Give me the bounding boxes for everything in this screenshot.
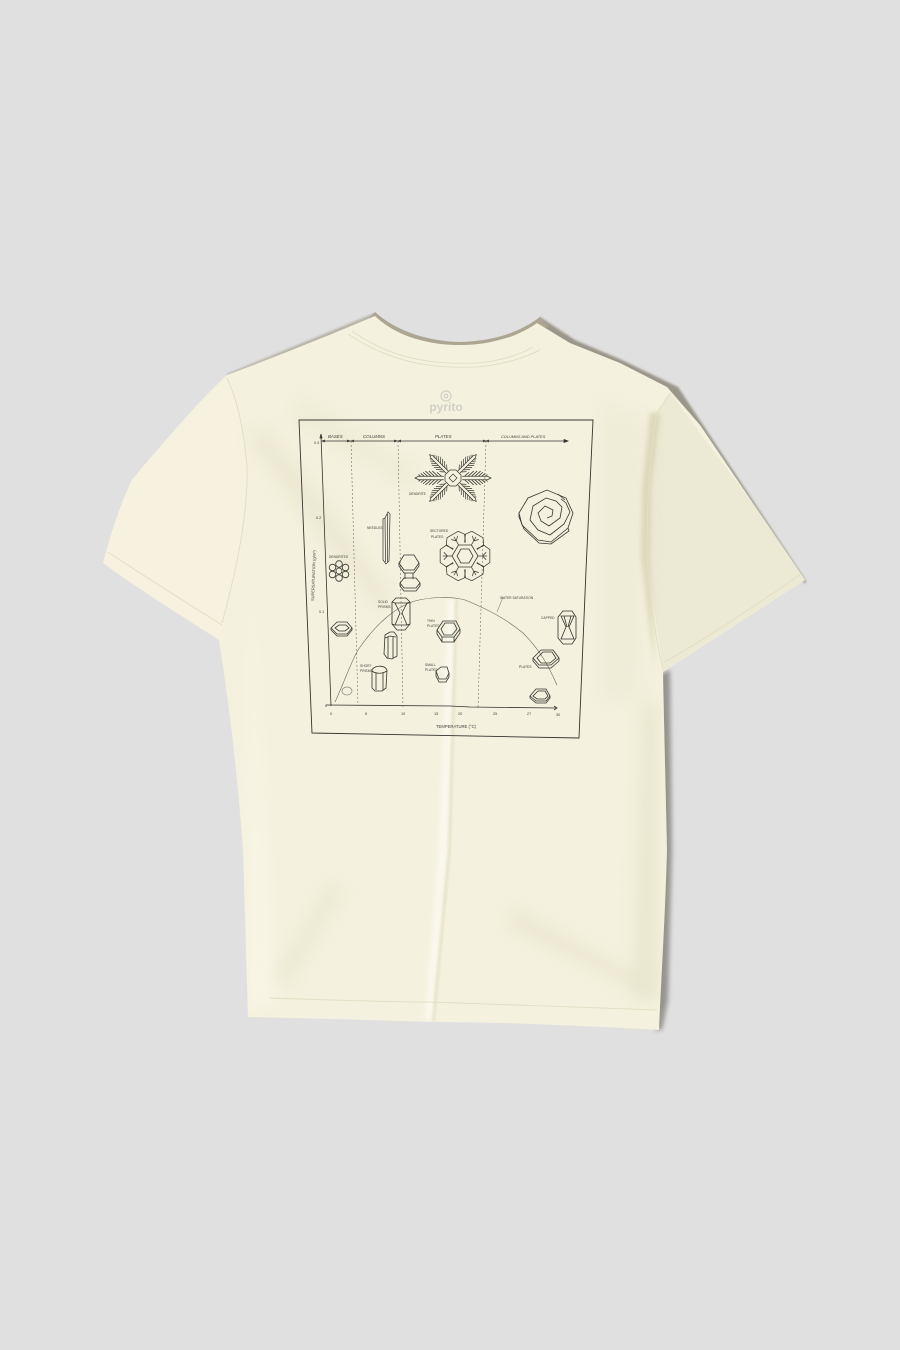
- left shoulder shadow: [227, 313, 375, 378]
- axis labels: 30: [556, 713, 560, 717]
- shirt body: [103, 316, 805, 1030]
- crystal labels: NEEDLES: [367, 526, 383, 530]
- shoulder shadow: [535, 317, 806, 584]
- crystal labels: SOLID: [378, 600, 389, 604]
- crystal: capped column: [399, 555, 420, 591]
- crystal: thin plate: [437, 621, 460, 642]
- seams: [108, 331, 800, 1010]
- axis labels: [310, 441, 560, 729]
- inner neck band: [367, 312, 549, 350]
- crystal: hexagonal plate left: [331, 622, 352, 636]
- axis labels: 27: [527, 712, 531, 716]
- chart print: [299, 420, 593, 738]
- axis labels: 0.2: [316, 516, 321, 520]
- crystal: needles: [383, 512, 390, 564]
- crystal: dendrite snowflake: [415, 450, 491, 506]
- temperature zone dashed lines: [351, 441, 486, 708]
- crystal labels: CAPPED: [541, 616, 555, 620]
- crystal: plate right upper: [533, 650, 559, 668]
- crystal labels: WATER SATURATION: [500, 596, 534, 600]
- crystal labels: DENDRITE: [409, 492, 427, 496]
- crystal labels: PLATES: [425, 668, 438, 672]
- crystal: short prism: [372, 666, 387, 691]
- axis labels: 5: [365, 712, 367, 716]
- crystal: small oval: [342, 687, 352, 695]
- axis labels: 0.3: [314, 441, 319, 445]
- crystal labels: PLATES: [427, 624, 440, 628]
- habit labels: PLATES: [435, 434, 452, 439]
- crystal: capped column right: [558, 611, 576, 644]
- crystal labels: DENDRITES: [329, 555, 349, 559]
- habit labels: COLUMNS: [363, 434, 385, 439]
- water saturation curve: [335, 597, 557, 702]
- axis labels: 15: [434, 712, 438, 716]
- axis labels: 25: [493, 712, 497, 716]
- crystal labels: SMALL: [425, 663, 436, 667]
- axis labels: 10: [401, 712, 405, 716]
- habit labels: [328, 434, 546, 439]
- axis labels: 0.1: [319, 610, 324, 614]
- crystal labels: SHORT: [360, 664, 371, 668]
- axis labels: 0: [325, 704, 327, 708]
- crystal: dendrite small: [329, 561, 349, 581]
- crystal labels: [329, 492, 555, 673]
- habit labels: COLUMNS AND PLATES: [501, 434, 546, 439]
- crystal labels: THIN: [427, 619, 435, 623]
- fabric shading: [258, 394, 805, 1022]
- growth habit arrows: [322, 440, 568, 442]
- crystal: spiral: [519, 490, 573, 544]
- crystal: sectored plate: [440, 529, 490, 583]
- crystal: hollow column: [392, 598, 410, 630]
- crystal: prism solid: [384, 632, 397, 659]
- axis labels: SUPERSATURATION (g/m³): [310, 549, 317, 601]
- logo wordmark: pyrito: [429, 400, 463, 414]
- axis labels: TEMPERATURE (°C): [436, 724, 477, 729]
- crystal: plate right lower: [530, 689, 550, 703]
- axis labels: 0: [330, 712, 332, 716]
- logo: [429, 391, 463, 414]
- t-shirt: [100, 312, 810, 1030]
- axes: [320, 434, 557, 710]
- chart frame: [299, 420, 593, 738]
- shirt drop shadow: [655, 670, 672, 1030]
- crystal labels: PLATES: [431, 535, 444, 539]
- crystal labels: SECTORED: [430, 529, 449, 533]
- axis labels: 20: [458, 712, 462, 716]
- crystal labels: PLATES: [519, 665, 532, 669]
- habit labels: BASES: [328, 434, 343, 439]
- crystal labels: PRISMS: [360, 669, 373, 673]
- crystal labels: PRISMS: [378, 605, 391, 609]
- crystal: small plate: [436, 667, 449, 682]
- logo icon: [441, 391, 451, 401]
